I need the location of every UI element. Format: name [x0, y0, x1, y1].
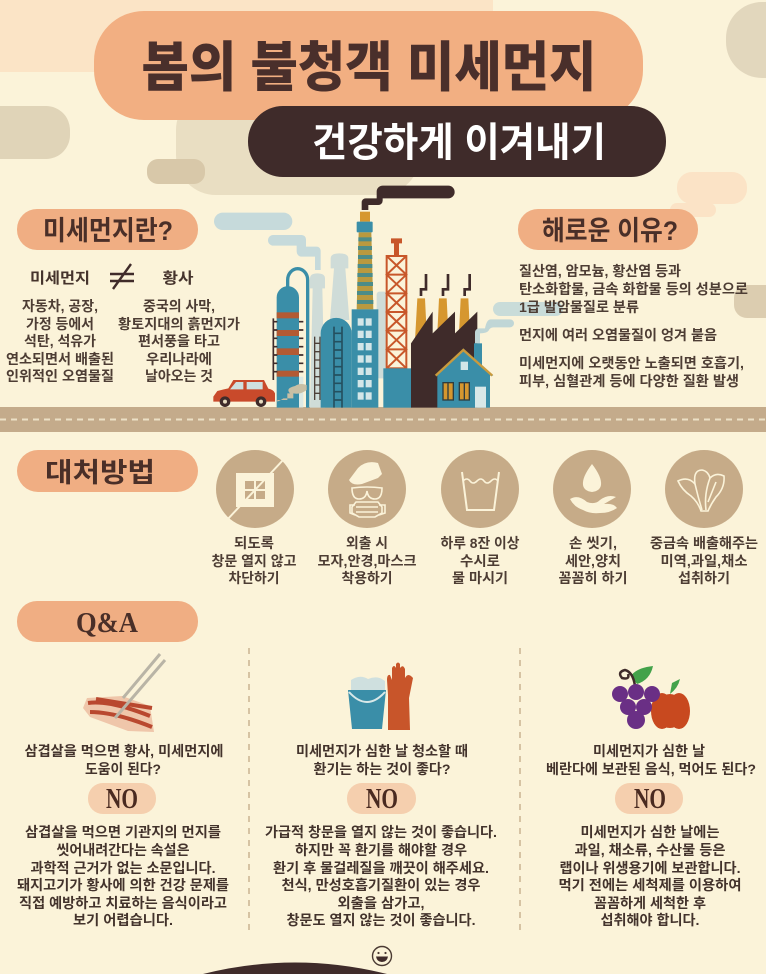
heading: countermeasures: 대처방법: [45, 458, 155, 488]
Q3: stored food: NO: [634, 784, 666, 815]
icon: leafy vegetable: [665, 450, 743, 528]
heading: what is fine dust: 미세먼지란?: [43, 216, 173, 246]
Q1: pork belly: 돼지고기가 황사에 의한 건강 문제를: [17, 877, 229, 893]
pale chimneys: [310, 253, 387, 408]
car: [213, 380, 275, 407]
windowed building: [352, 309, 378, 408]
bottom dark banner: [203, 962, 387, 974]
heading: why harmful: [518, 209, 698, 250]
Q1: pork belly: 삼겹살을 먹으면 기관지의 먼지를: [25, 824, 221, 840]
icon: blocked window: [216, 450, 294, 528]
Q2: cleaning: 환기 후 물걸레질을 깨끗이 해주세요.: [273, 860, 489, 876]
striped chimney: [357, 212, 373, 309]
text: fine dust definition: 석탄, 석유가: [24, 333, 96, 349]
text: fine dust definition: 인위적인 오염물질: [6, 368, 114, 384]
Q2: cleaning: NO: [366, 784, 398, 815]
Q2: cleaning: 외출을 삼가고,: [338, 895, 424, 911]
text: yellow dust definition: 중국의 사막,: [143, 298, 215, 314]
tip 5: heavy metal foods: 미역,과일,채소: [660, 553, 748, 569]
Q2: cleaning: 미세먼지가 심한 날 청소할 때: [296, 743, 468, 759]
text: yellow dust definition: 우리나라에: [146, 351, 212, 367]
tip 2: hat, glasses, mask: 착용하기: [342, 570, 392, 586]
Q1: pork belly: [17, 654, 229, 928]
text: yellow dust definition: 편서풍을 타고: [138, 333, 220, 349]
icon: hand and water drop: [553, 450, 631, 528]
text: fine dust definition: 자동차, 공장,: [22, 298, 98, 314]
tip 3: drink water: [440, 450, 520, 586]
subtitle banner: [248, 106, 666, 177]
Q3: stored food: 섭취해야 합니다.: [600, 912, 700, 928]
Q2: cleaning: 창문도 열지 않는 것이 좋습니다.: [286, 912, 476, 928]
Q1: pork belly: 과학적 근거가 없는 소문입니다.: [30, 860, 216, 876]
Q3: stored food: 꼼꼼하게 세척한 후: [594, 895, 706, 911]
icon: glass of water: [441, 450, 519, 528]
icon: hat glasses mask: [328, 450, 406, 528]
dome building: [315, 318, 352, 408]
text: reasons: 탄소화합물, 금속 화합물 등의 성분으로: [519, 281, 748, 297]
tip 3: drink water: 수시로: [460, 553, 500, 569]
factory with sawtooth roof: [411, 274, 477, 408]
title banner: 봄의 불청객 미세먼지: [142, 38, 596, 98]
icon: pork belly with chopsticks: [83, 654, 165, 732]
Q1: pork belly: 도움이 된다?: [85, 761, 161, 777]
Q2: cleaning: 가급적 창문을 열지 않는 것이 좋습니다.: [265, 824, 497, 840]
text: reasons: 피부, 심혈관계 등에 다양한 질환 발생: [519, 373, 739, 389]
text: reasons: 1급 발암물질로 분류: [519, 299, 639, 315]
tip 5: heavy metal foods: 중금속 배출해주는: [650, 535, 758, 551]
Q1: pork belly: 보기 어렵습니다.: [73, 912, 173, 928]
comparison: fine dust vs yellow dust: 미세먼지: [30, 270, 90, 287]
comparison: fine dust vs yellow dust: 황사: [162, 270, 194, 287]
text: yellow dust definition: 황토지대의 흙먼지가: [118, 316, 240, 332]
Q3: stored food: 랩이나 위생용기에 보관합니다.: [560, 860, 740, 876]
Q3: stored food: 과일, 채소류, 수산물 등은: [574, 842, 726, 858]
exhaust: [277, 384, 307, 402]
lattice tower: [383, 238, 412, 408]
icon: grapes and apple: [612, 666, 690, 729]
Q3: stored food: 미세먼지가 심한 날: [593, 743, 705, 759]
text: reasons: [519, 263, 748, 389]
tip 5: heavy metal foods: 섭취하기: [678, 570, 730, 586]
Q2: cleaning: 천식, 만성호흡기질환이 있는 경우: [282, 877, 481, 893]
subtitle banner: 건강하게 이겨내기: [312, 121, 606, 165]
icon: smiley: [372, 946, 392, 966]
tip 4: wash hands: 꼼꼼히 하기: [558, 570, 628, 586]
text: fine dust definition: 연소되면서 배출된: [6, 351, 114, 367]
background blobs: [0, 0, 766, 318]
title banner: [94, 11, 643, 120]
tip 4: wash hands: 세안,양치: [565, 553, 621, 569]
heading: why harmful: 해로운 이유?: [542, 216, 678, 246]
Q3: stored food: 베란다에 보관된 음식, 먹어도 된다?: [546, 761, 756, 777]
Q3: stored food: 먹기 전에는 세척제를 이용하여: [558, 877, 742, 893]
heading: Q&A: Q&A: [76, 608, 139, 639]
Q1: pork belly: 직접 예방하고 치료하는 음식이라고: [19, 895, 227, 911]
tip 4: wash hands: 손 씻기,: [569, 535, 617, 551]
tip 4: wash hands: [553, 450, 631, 586]
tip 1: close windows: 되도록: [234, 535, 274, 551]
tip 1: close windows: 차단하기: [228, 570, 280, 586]
text: fine dust definition: 가정 등에서: [26, 316, 94, 332]
tip 2: hat, glasses, mask: 모자,안경,마스크: [318, 553, 417, 569]
Q1: pork belly: 삼겹살을 먹으면 황사, 미세먼지에: [24, 743, 224, 759]
Q1: pork belly: 씻어내려간다는 속설은: [56, 842, 190, 858]
dark smoke: [362, 186, 455, 210]
road: [0, 407, 766, 432]
house: [436, 343, 493, 408]
heading: what is fine dust: [17, 209, 198, 250]
text: reasons: 먼지에 여러 오염물질이 엉겨 붙음: [519, 327, 717, 343]
tip 1: close windows: 창문 열지 않고: [212, 553, 297, 569]
right smoke: [475, 319, 514, 343]
heading: countermeasures: [17, 450, 198, 492]
pale smoke: [214, 213, 321, 270]
Q3: stored food: [546, 666, 756, 928]
tip 3: drink water: 하루 8잔 이상: [440, 535, 520, 551]
text: fine dust definition: [6, 298, 114, 384]
Q3: stored food: 미세먼지가 심한 날에는: [580, 824, 720, 840]
text: reasons: 미세먼지에 오랫동안 노출되면 호흡기,: [519, 355, 744, 371]
text: yellow dust definition: [118, 298, 240, 384]
illustration: factory skyline: [213, 186, 514, 408]
Q2: cleaning: 하지만 꼭 환기를 해야할 경우: [295, 842, 467, 858]
text: reasons: 질산염, 암모늄, 황산염 등과: [519, 263, 681, 279]
heading: Q&A: [17, 601, 198, 642]
tip 1: close windows: [212, 450, 297, 586]
distillation tower: [273, 269, 308, 408]
comparison: fine dust vs yellow dust: [30, 264, 194, 289]
Q2: cleaning: 환기는 하는 것이 좋다?: [314, 761, 450, 777]
column dividers: [249, 648, 520, 934]
text: yellow dust definition: 날아오는 것: [145, 368, 213, 384]
tip 5: heavy metal foods: [650, 450, 758, 586]
icon: bucket and rubber glove: [348, 662, 413, 730]
Q2: cleaning: [265, 662, 497, 928]
tip 2: hat, glasses, mask: 외출 시: [346, 535, 388, 551]
Q1: pork belly: NO: [106, 784, 138, 815]
tip 2: hat, glasses, mask: [318, 450, 417, 586]
tip 3: drink water: 물 마시기: [452, 570, 508, 586]
